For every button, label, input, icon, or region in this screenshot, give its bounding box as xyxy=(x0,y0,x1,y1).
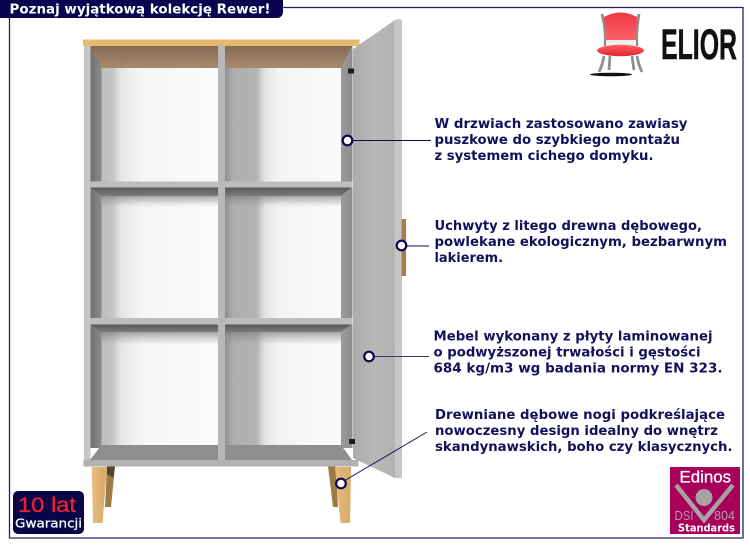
callout text: handles: Uchwyty z litego drewna dębowego, xyxy=(434,219,702,234)
top underside xyxy=(90,46,352,68)
badge: Edinos standards xyxy=(670,467,740,534)
badge: 10 years warranty: Gwarancji xyxy=(15,516,82,530)
header title: Poznaj wyjątkową kolekcję Rewer! xyxy=(10,2,270,18)
badge: 10 years warranty xyxy=(13,491,84,534)
callout text: hinges: W drzwiach zastosowano zawiasy xyxy=(434,117,688,132)
callout text: handles xyxy=(434,219,727,266)
center divider xyxy=(218,46,225,460)
callout text: hinges: puszkowe do szybkiego montażu xyxy=(434,133,680,148)
callout text: board xyxy=(434,330,722,376)
callout text: handles: powlekane ekologicznym, bezbarwnym xyxy=(434,235,727,250)
badge: Edinos standards: Edinos xyxy=(680,468,731,486)
logo: Elior xyxy=(590,12,737,76)
callout text: hinges xyxy=(434,117,688,164)
callout text: handles: lakierem. xyxy=(434,251,503,266)
callout: legs xyxy=(336,408,732,488)
front legs xyxy=(92,467,351,523)
header bar xyxy=(0,0,283,18)
shelf undersides xyxy=(90,187,352,332)
badge: Edinos standards: Standards xyxy=(678,522,735,534)
callout text: hinges: z systemem cichego domyku. xyxy=(434,149,654,164)
door xyxy=(353,19,402,478)
callout text: board: o podwyższonej trwałości i gęstości xyxy=(434,346,700,360)
door handle xyxy=(402,219,406,276)
callout text: legs: skandynawskich, boho czy klasycznych. xyxy=(435,440,732,455)
cabinet back panels xyxy=(101,67,342,446)
callout text: board: Mebel wykonany z płyty laminowanej xyxy=(434,330,712,344)
left outer side xyxy=(84,46,90,461)
hinges xyxy=(348,68,355,444)
callout text: legs: Drewniane dębowe nogi podkreślające xyxy=(435,408,725,423)
callout text: legs xyxy=(435,408,732,455)
cabinet illustration xyxy=(83,19,406,523)
back legs xyxy=(105,466,338,507)
inner side walls xyxy=(90,46,352,448)
badge: 10 years warranty: 10 lat xyxy=(18,494,76,517)
callout text: board: 684 kg/m3 wg badania normy EN 323. xyxy=(434,362,722,376)
top board xyxy=(83,40,360,46)
callout: hinges xyxy=(343,117,688,164)
bottom front panel xyxy=(84,460,358,466)
callout: board xyxy=(364,330,722,376)
badge: Edinos standards: DSI xyxy=(674,508,694,523)
badge: Edinos standards: 804 xyxy=(714,508,735,523)
callout text: legs: nowoczesny design idealny do wnętrz xyxy=(435,424,718,439)
icon: red chair xyxy=(590,12,644,76)
callout: handles xyxy=(397,219,727,266)
shelves xyxy=(90,182,352,324)
bottom floor xyxy=(90,445,352,460)
